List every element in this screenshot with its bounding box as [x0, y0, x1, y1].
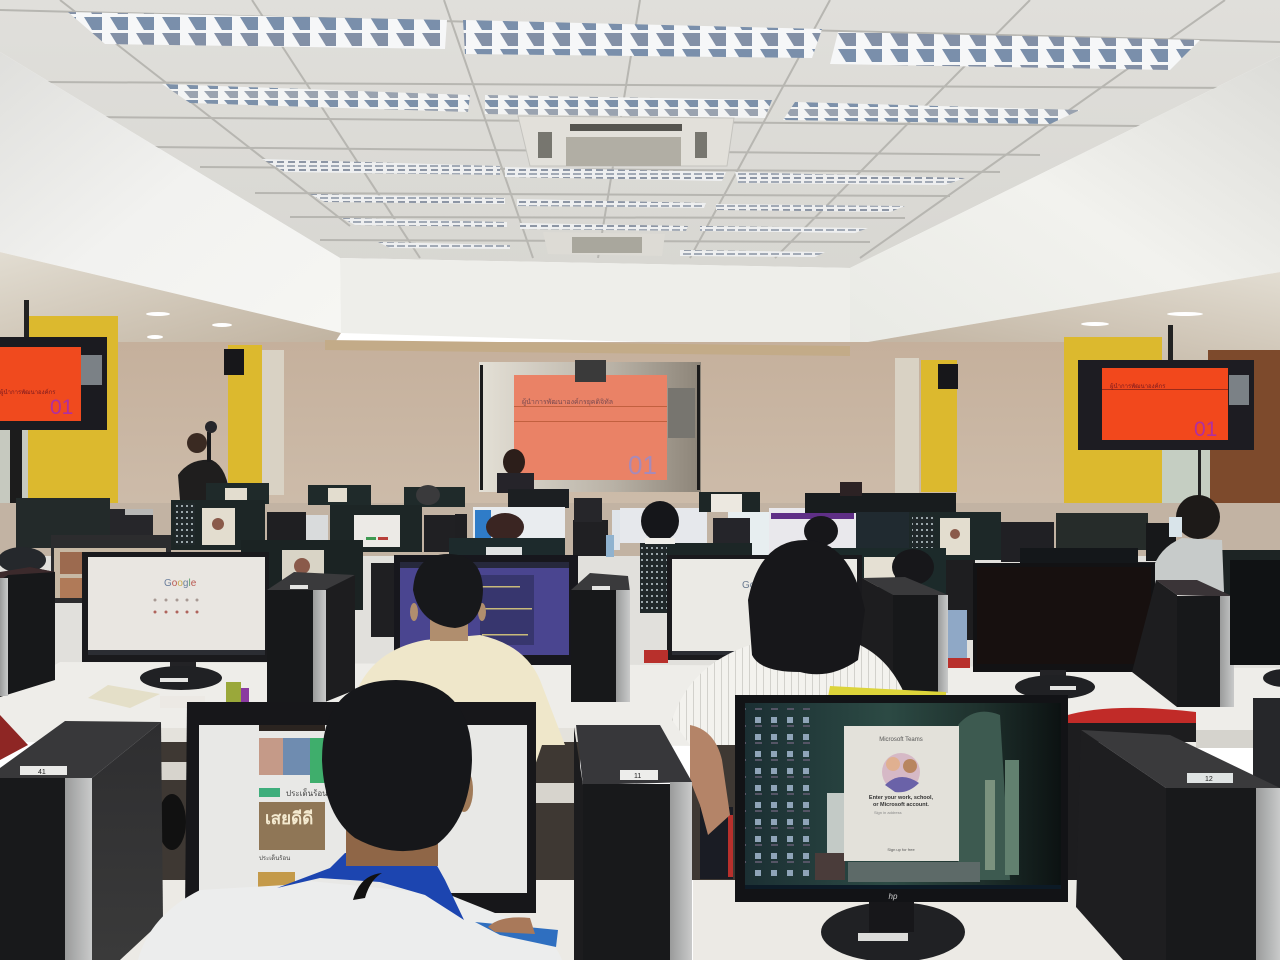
rear floor background	[0, 503, 1280, 565]
tan wall strip under soffit	[325, 340, 850, 356]
cameraman	[178, 421, 230, 500]
red chair	[0, 708, 1196, 880]
front monitor with web page: ประเด็นร้อน	[286, 788, 328, 798]
front monitor with web page: ประเด็นร้อน	[259, 853, 290, 862]
Teams sign-in dialog: Enter your work, school,	[869, 795, 934, 801]
ceiling	[0, 0, 1280, 268]
front monitor with web page: เสยดีดี	[265, 808, 313, 828]
dark gap between desks	[692, 745, 737, 880]
front monitor with Microsoft Teams sign-in	[735, 695, 1068, 960]
right-edge front monitor	[1253, 698, 1280, 788]
back soffit	[340, 258, 850, 345]
tower PC centre middle	[571, 573, 630, 702]
left wall TV: ผู้นำการพัฒนาองค์กร	[0, 388, 56, 396]
ceiling downlights	[146, 312, 1203, 362]
left wall TV	[0, 300, 107, 530]
wall pipes	[262, 350, 919, 495]
front-left tower PC	[0, 721, 163, 960]
middle desk	[0, 662, 1280, 748]
red chair stripe	[728, 815, 733, 877]
trousers	[700, 807, 733, 879]
monitor stand	[821, 902, 965, 960]
taskbar	[745, 885, 1061, 889]
far-left tower	[0, 567, 55, 697]
Teams sign-in dialog: Microsoft Teams	[879, 737, 923, 743]
tower PC far right	[1132, 580, 1234, 707]
rear rows of monitors	[16, 482, 1176, 562]
front-right tower PC	[1076, 730, 1280, 960]
back wall	[118, 342, 1068, 512]
black chair back	[158, 794, 186, 850]
Teams sign-in dialog: or Microsoft account.	[873, 802, 929, 808]
right wall TV: ผู้นำการพัฒนาองค์กร	[1110, 382, 1166, 390]
second Google monitor: Google	[742, 580, 775, 591]
yellow paper	[828, 686, 946, 697]
slide on screen: ผู้นำการพัฒนาองค์กรยุคดิจิทัล	[522, 398, 613, 406]
front desk surfaces	[120, 880, 1280, 960]
Teams sign-in dialog: Sign up for free	[887, 847, 915, 852]
front attendee with blue collar	[138, 680, 562, 960]
desk front edge	[160, 728, 580, 744]
wall speakers	[224, 349, 958, 389]
red chair seats in middle row	[644, 650, 970, 668]
right soffit wall	[850, 56, 1280, 345]
centre front tower PC	[574, 725, 692, 960]
monitor with Google homepage	[82, 552, 269, 690]
presenter	[497, 449, 569, 507]
front-left tower PC: 41	[38, 769, 46, 776]
under-desk band	[160, 742, 580, 880]
right wall TV: 01	[1194, 418, 1217, 441]
rear attendees	[0, 495, 1224, 658]
monitor with Google homepage: Google	[164, 578, 197, 589]
tower PC right of long-hair attendee	[862, 577, 948, 693]
middle desk background	[0, 556, 1280, 670]
desk booklets and bottles	[88, 682, 249, 708]
projector screen	[479, 360, 701, 492]
left wall TV: 01	[50, 396, 73, 419]
desktop wallpaper arches	[815, 712, 1019, 882]
glass doors left	[0, 425, 30, 525]
right lower ceiling	[850, 272, 1280, 362]
left soffit wall	[0, 52, 341, 333]
front-right tower PC: 12	[1205, 776, 1213, 783]
ceiling lights	[68, 12, 1200, 257]
attendee in yellow shirt	[340, 554, 565, 780]
tower PC left middle	[267, 572, 355, 702]
large dark monitor	[973, 563, 1155, 699]
desk edge right	[1196, 730, 1256, 748]
glass doors right	[1155, 448, 1210, 518]
right wall TV	[1078, 325, 1254, 510]
second row of monitors	[51, 535, 1280, 640]
slide on screen	[514, 375, 667, 480]
centre front tower PC: 11	[634, 773, 641, 780]
attendee with long black hair	[672, 540, 946, 879]
pale shelf bands	[160, 762, 575, 803]
arm	[690, 725, 730, 835]
yellow columns	[28, 316, 1162, 512]
desktop icons	[745, 706, 810, 876]
wood wall right	[1208, 350, 1280, 550]
air conditioning units	[518, 116, 734, 256]
front monitor with web page	[185, 702, 536, 913]
monitor with purple app	[394, 555, 578, 665]
far-right monitor	[1230, 560, 1280, 687]
Teams sign-in dialog	[844, 726, 959, 861]
slide on screen: 01	[628, 450, 657, 480]
left lower ceiling	[0, 252, 341, 350]
second Google monitor	[667, 555, 862, 660]
front monitor with Microsoft Teams sign-in: hp	[889, 892, 898, 901]
Teams sign-in dialog: Sign in address	[874, 810, 902, 815]
